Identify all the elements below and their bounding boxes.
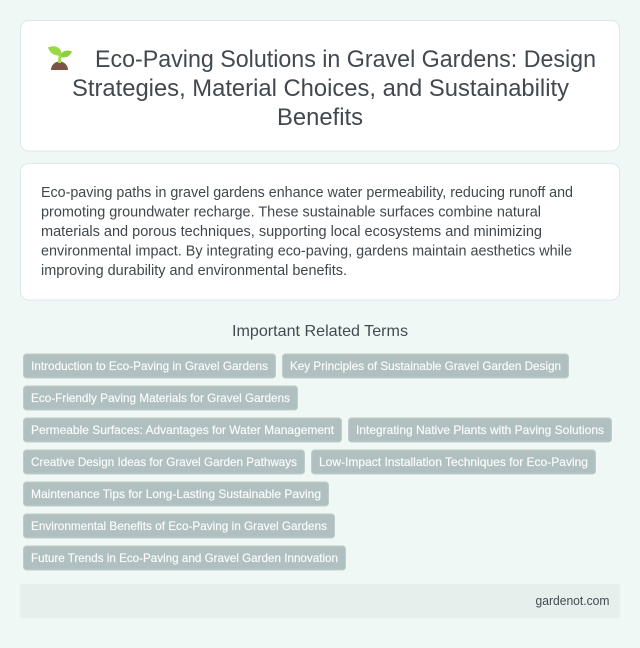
tag: Introduction to Eco-Paving in Gravel Gardens	[31, 359, 268, 373]
tag	[24, 514, 334, 538]
tag	[24, 386, 298, 410]
title	[72, 46, 596, 131]
text block: description: Eco-paving paths in gravel gardens enhance water permeability, reducing runoff and	[41, 185, 573, 201]
tag: Maintenance Tips for Long-Lasting Sustainable Paving	[31, 487, 321, 501]
tag: Future Trends in Eco-Paving and Gravel Garden Innovation	[31, 551, 338, 565]
tag	[348, 418, 612, 442]
panel: title card	[20, 20, 620, 151]
tag: Integrating Native Plants with Paving Solutions	[356, 423, 604, 437]
text block: description: environmental impact. By integrating eco-paving, gardens maintain aesthetics while	[41, 244, 572, 260]
tag	[24, 450, 304, 474]
tag	[282, 354, 568, 378]
tag	[24, 546, 346, 570]
text block: description: materials and porous techniques, supporting local ecosystems and minimizing	[41, 224, 542, 240]
tag	[312, 450, 596, 474]
text block: description: promoting groundwater recharge. These sustainable surfaces combine natural	[41, 204, 541, 220]
heading: related terms: Important Related Terms	[232, 323, 408, 340]
tag: Eco-Friendly Paving Materials for Gravel Gardens	[31, 391, 290, 405]
footer	[20, 584, 620, 618]
tag	[24, 418, 342, 442]
tag: Low-Impact Installation Techniques for Eco-Paving	[319, 455, 588, 469]
tag	[24, 354, 276, 378]
panel: description	[20, 164, 620, 300]
footer text: gardenot.com	[536, 594, 610, 608]
title: Eco-Paving Solutions in Gravel Gardens: Design	[95, 46, 596, 73]
panel: term tags	[24, 354, 612, 570]
tag: Creative Design Ideas for Gravel Garden Pathways	[31, 455, 297, 469]
tag: Key Principles of Sustainable Gravel Garden Design	[290, 359, 561, 373]
tag	[24, 482, 328, 506]
tag: Permeable Surfaces: Advantages for Water Management	[31, 423, 335, 437]
title: Strategies, Material Choices, and Sustainability	[72, 75, 569, 102]
text block: description	[41, 185, 573, 279]
icon: seedling	[48, 46, 72, 70]
tag: Environmental Benefits of Eco-Paving in Gravel Gardens	[31, 519, 327, 533]
title: Benefits	[277, 104, 363, 131]
text block: description: improving durability and environmental benefits.	[41, 263, 347, 279]
